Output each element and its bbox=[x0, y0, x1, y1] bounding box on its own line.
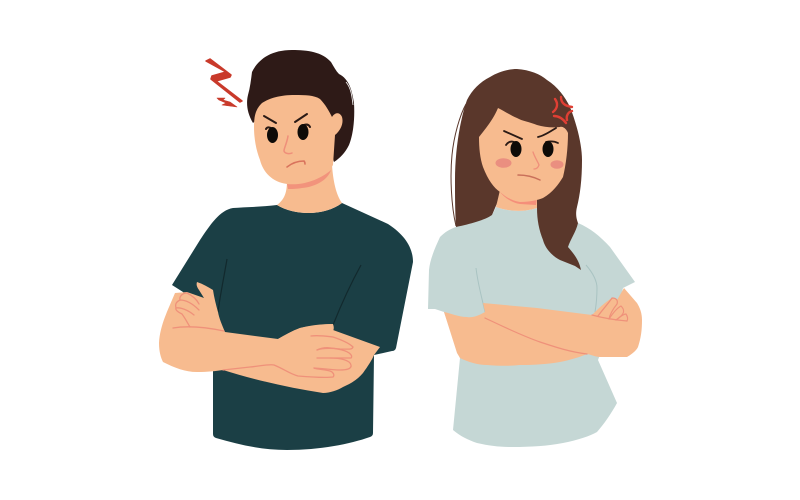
woman figure bbox=[428, 69, 642, 447]
man face bbox=[254, 95, 343, 184]
woman shirt bbox=[428, 207, 635, 447]
woman hair strand bbox=[451, 104, 466, 226]
woman neck bbox=[496, 190, 537, 211]
woman cheeks bbox=[496, 158, 512, 168]
woman shirt folds bbox=[476, 265, 597, 312]
woman hair bbox=[455, 69, 582, 270]
man hair bbox=[247, 50, 354, 162]
man figure bbox=[159, 50, 413, 450]
woman face bbox=[479, 108, 568, 202]
icon: lightning bolt small bbox=[217, 98, 237, 107]
man hand lines bbox=[173, 293, 353, 377]
woman neck shadow bbox=[500, 192, 537, 205]
man mouth bbox=[287, 161, 305, 167]
man shirt bbox=[172, 203, 413, 450]
icon: lightning bolt large bbox=[206, 59, 242, 102]
woman hand and arm lines bbox=[485, 298, 628, 354]
man nose bbox=[284, 136, 292, 154]
man eyes bbox=[267, 127, 278, 143]
woman arms bbox=[444, 288, 642, 366]
woman mouth bbox=[518, 175, 540, 180]
woman nose bbox=[533, 152, 539, 169]
woman brows bbox=[504, 128, 558, 145]
man neck bbox=[277, 165, 342, 213]
man arms bbox=[159, 282, 380, 393]
man neck shadow bbox=[287, 170, 331, 189]
icon: anger mark bbox=[553, 97, 572, 123]
man right hand bbox=[272, 324, 354, 377]
woman eyes bbox=[510, 141, 522, 157]
man shirt folds bbox=[218, 259, 361, 325]
man brows bbox=[264, 114, 310, 129]
man hair highlight bbox=[346, 82, 353, 105]
